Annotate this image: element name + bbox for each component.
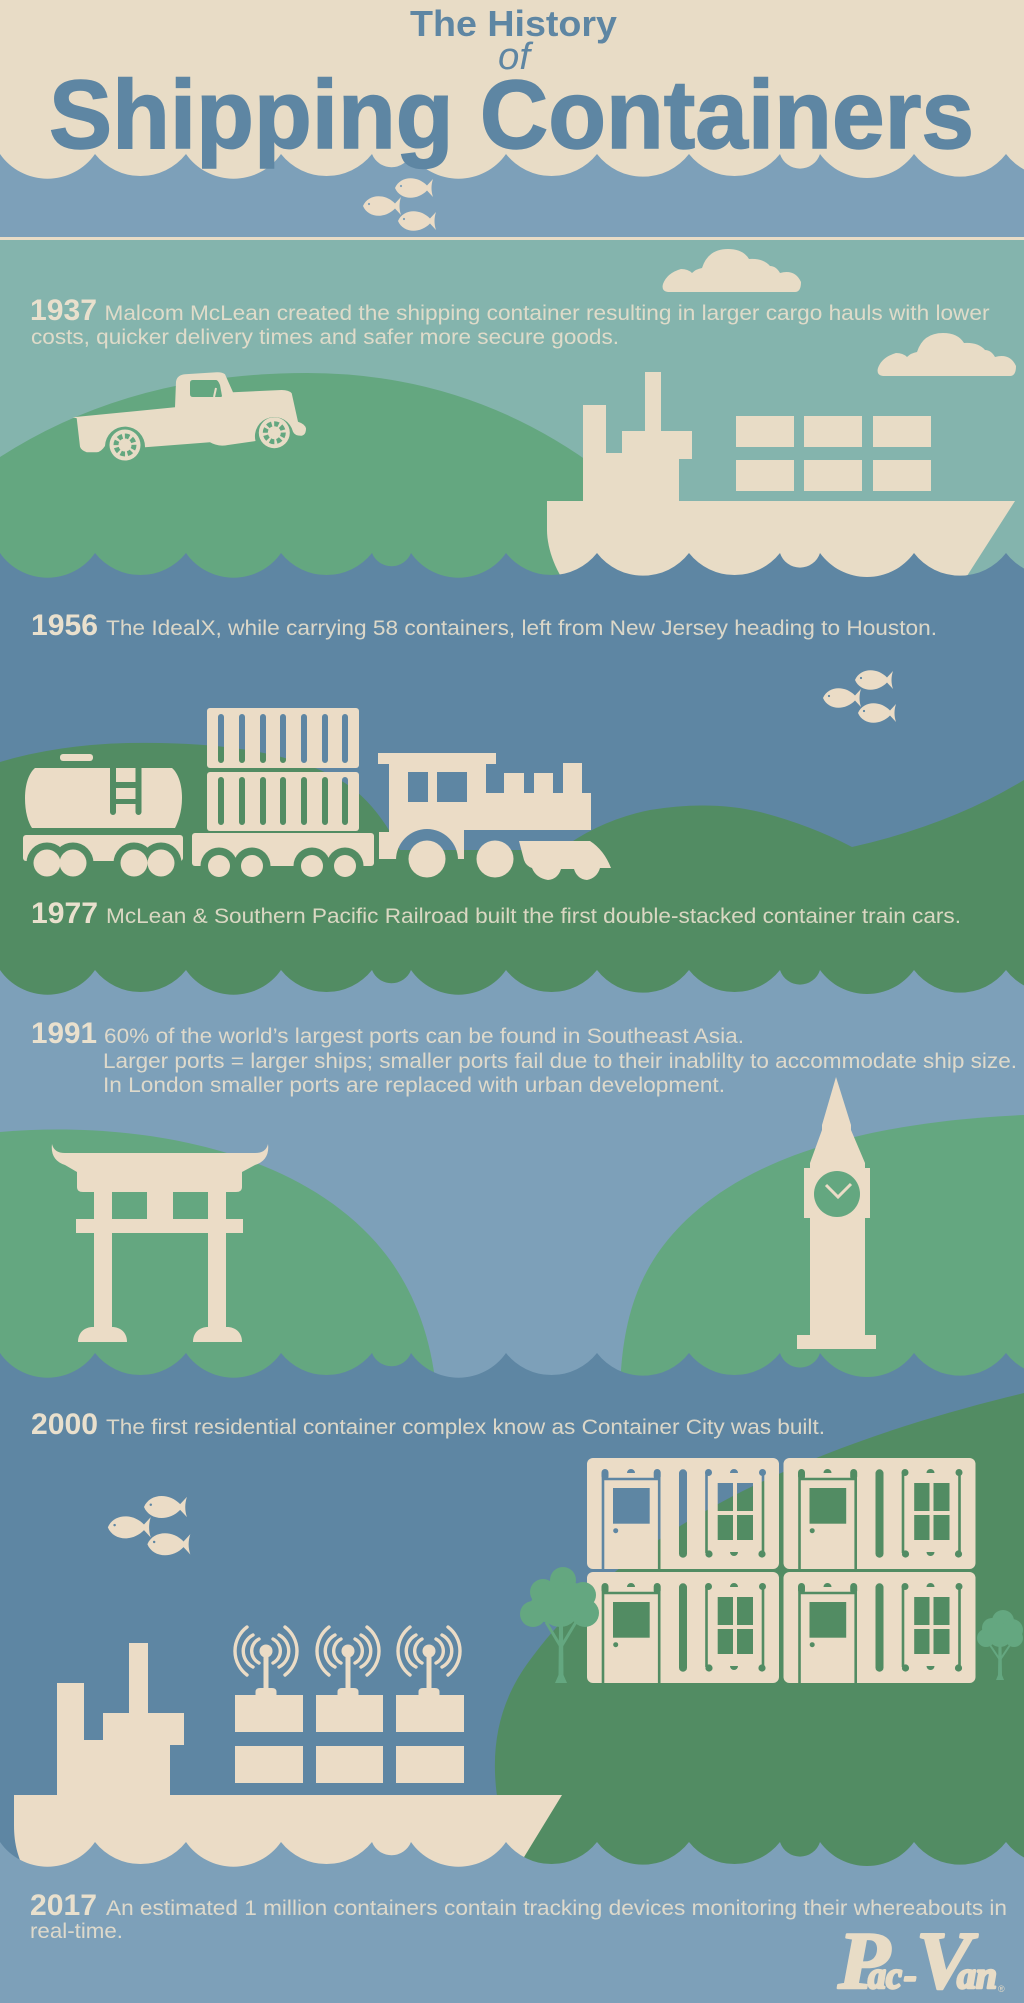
icon: cloud two [878,333,1016,376]
panel: header [0,0,1024,240]
text: 1991: 60% of the world’s largest ports can be found in Southeast Asia. [104,1025,744,1048]
text: 2017: real-time. [30,1920,123,1943]
icon: ship with tracked containers [14,1627,562,1880]
icon: school of fish [363,178,436,231]
text: 2017: 2017 [30,1889,97,1922]
icon: school of fish [823,670,896,723]
icon: container city building [587,1458,976,1683]
logo: Pac-Van: an [957,1955,997,1997]
text: 1956: The IdealX, while carrying 58 containers, left from New Jersey heading to Houston. [106,617,937,640]
title: The History [410,3,617,44]
icon: tracking antennas [235,1627,460,1696]
dark green hills [0,743,1024,1010]
text: 2017: An estimated 1 million containers contain tracking devices monitoring their whereabouts in [106,1897,1007,1920]
panel: footer [0,1842,1024,2003]
text: 1977: 1977 [31,897,98,930]
title: Shipping Containers [49,60,974,169]
logo: Pac-Van [837,1915,1005,2003]
icon: large tree [520,1567,599,1683]
title: of [498,36,533,78]
green hill [0,373,600,600]
text: 2017 [30,1889,1007,1943]
right green hill [620,1115,1024,1400]
dark green hill [495,1393,1024,1880]
icon: container ship [547,372,1015,590]
icon: small tree [977,1610,1023,1680]
logo: Pac-Van: - [904,1955,917,1997]
text: 1937: costs, quicker delivery times and safer more secure goods. [31,326,619,349]
water band under header [0,154,1024,237]
text: 1956: 1956 [31,609,98,642]
panel: 1991 [0,970,1024,1400]
text: 2000: The first residential container complex know as Container City was built. [106,1416,825,1439]
logo: Pac-Van: ® [998,1984,1005,1994]
title [49,3,974,169]
text: 2000: 2000 [31,1408,98,1441]
text: 1991: 1991 [31,1017,97,1050]
text: 1937: 1937 [30,294,97,327]
panel: 1956 and 1977 [0,553,1024,1010]
text: 1991: In London smaller ports are replaced with urban development. [103,1074,725,1097]
icon: freight train [23,708,611,880]
text: 1937: Malcom McLean created the shipping container resulting in larger cargo hauls with lower [104,302,989,325]
text: 1977: McLean & Southern Pacific Railroad built the first double-stacked container train cars. [106,905,961,928]
text: 2000 [31,1408,825,1441]
text: 1991 [31,1017,1017,1097]
text: 1937 [30,294,989,349]
text: 1977 [31,897,961,930]
text: 1991: Larger ports = larger ships; smaller ports fail due to their inablilty to accommodate ship size. [103,1050,1017,1073]
icon: pickup truck [73,372,306,460]
panel: 1937 [0,240,1024,600]
logo: Pac-Van: ac [868,1955,902,1997]
panel: 2000 and 2017 [0,1353,1024,1880]
text: 1956 [31,609,937,642]
left green hill [0,1130,437,1400]
icon: school of fish [108,1496,190,1555]
icon: clock tower [797,1077,876,1349]
icon: cloud one [663,249,801,292]
icon: torii gate [52,1144,268,1342]
